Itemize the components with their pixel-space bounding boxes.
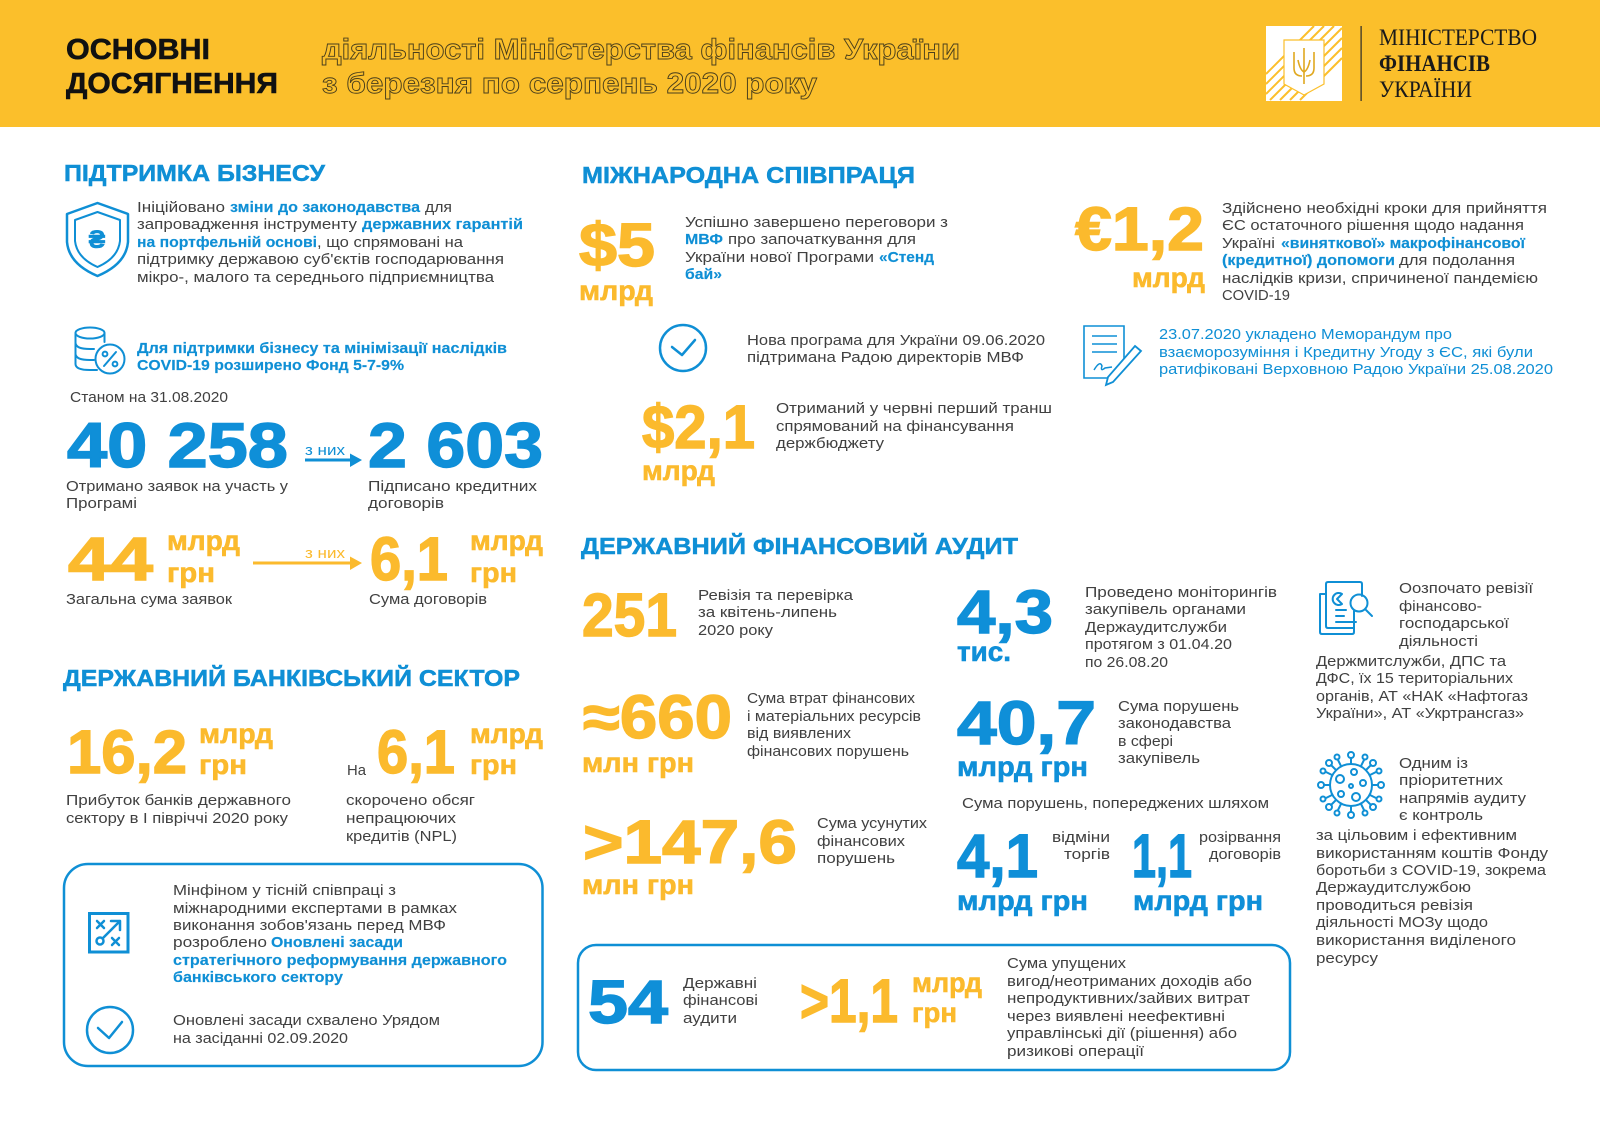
- text: memorandum: взаєморозуміння і Кредитну Угоду з ЄС, які були: [1159, 344, 1533, 361]
- text: IMF negotiations: про започаткування для: [728, 231, 916, 248]
- stat: 40.7 billion violations: Сума порушень: [1118, 698, 1239, 715]
- text: government approval: Оновлені засади схвалено Урядом: [173, 1012, 440, 1029]
- caption: prevented violations: Сума порушень, попереджених шляхом: [962, 795, 1269, 812]
- text: strategic reform: виконання зобов'язань перед МВФ: [173, 917, 446, 934]
- text: audit scope: діяльності: [1399, 633, 1478, 650]
- stat: 1.1 billion lost revenue: млрд: [912, 967, 982, 998]
- stat: 5 billion dollars: [579, 211, 655, 306]
- stat: 1.1 billion terminated contracts: [1132, 822, 1281, 916]
- stat: 2.1 billion dollars: млрд: [642, 455, 715, 486]
- text: COVID fund control: за цільовим і ефективним: [1316, 827, 1517, 844]
- stat: total applications sum: млрд: [167, 525, 240, 556]
- logo wordmark: МІНІСТЕРСТВО: [1379, 25, 1537, 50]
- text: COVID fund control: проводиться ревізія: [1316, 897, 1473, 914]
- stat: NPL reduction: непрацюючих: [346, 810, 457, 827]
- text: first tranche: держбюджету: [776, 435, 885, 452]
- icon: check circle: [87, 1007, 133, 1053]
- text: government approval: [173, 1012, 440, 1047]
- heading: international cooperation: МІЖНАРОДНА СПІВПРАЦЯ: [582, 162, 915, 188]
- stat: 1.1 billion terminated contracts: 1,1: [1132, 822, 1192, 890]
- text: memorandum: ратифіковані Верховною Радою України 25.08.2020: [1159, 361, 1553, 378]
- text: audit scope: України», АТ «Укртрансгаз»: [1316, 705, 1524, 722]
- stat: 1.1 billion lost revenue: [800, 967, 982, 1035]
- stat: 4.1 billion cancelled tenders: 4,1: [957, 822, 1038, 890]
- stat: total applications sum: [66, 525, 240, 608]
- text: memorandum: [1159, 326, 1553, 378]
- text: EU macro-financial assistance: «виняткової» макрофінансової: [1281, 235, 1526, 252]
- text: IMF negotiations: України нової Програми: [685, 249, 874, 266]
- stat: 1.2 billion euro: €1,2: [1075, 195, 1204, 263]
- stat: 4.3 thousand monitorings: [957, 578, 1277, 671]
- stat: 4.3 thousand monitorings: Держаудитслужби: [1085, 619, 1227, 636]
- text: COVID fund control: ресурсу: [1316, 950, 1379, 967]
- stat: NPL reduction: [346, 718, 543, 845]
- stat: contracts: Підписано кредитних: [368, 478, 538, 495]
- stat: 40.7 billion violations: законодавства: [1118, 715, 1232, 732]
- panel: state financial audit: [578, 532, 1549, 1070]
- stat: 147.6 million eliminated: Сума усунутих: [817, 815, 928, 832]
- text: lost revenue description: через виявлені неефективні: [1007, 1008, 1225, 1025]
- stat: contracts sum: [369, 525, 543, 608]
- text: legislation changes: мікро-, малого та середнього підприємництва: [137, 269, 495, 286]
- text: legislation changes: на портфельній основі: [137, 234, 317, 251]
- stat: bank profit: Прибуток банків державного: [66, 792, 291, 809]
- stat: 660 million loss: від виявлених: [747, 725, 852, 742]
- text: strategic reform: Мінфіном у тісній співпраці з: [173, 882, 396, 899]
- text: government approval: на засіданні 02.09.2020: [173, 1030, 348, 1047]
- stat: NPL reduction: млрд: [470, 718, 543, 749]
- text: new program: [747, 332, 1045, 366]
- text: COVID fund control: Одним із: [1399, 755, 1468, 772]
- title: ДОСЯГНЕННЯ: [66, 68, 278, 100]
- text: legislation changes: державних гарантій: [362, 216, 523, 233]
- stat: 4.3 thousand monitorings: закупівель органами: [1085, 601, 1246, 618]
- stat: contracts sum: 6,1: [370, 525, 448, 593]
- text: memorandum: 23.07.2020 укладено Меморандум про: [1159, 326, 1452, 343]
- text: lost revenue description: Сума упущених: [1007, 955, 1127, 972]
- text: legislation changes: підтримку державою суб'єктів господарювання: [137, 251, 504, 268]
- title: [66, 34, 278, 100]
- stat: 1.1 billion terminated contracts: млрд грн: [1133, 885, 1263, 916]
- text: EU macro-financial assistance: наслідків кризи, спричиненої пандемією: [1222, 270, 1538, 287]
- text: COVID fund control: використанням коштів Фонду: [1316, 845, 1549, 862]
- stat: 660 million loss: ≈660: [583, 683, 732, 751]
- text: COVID fund control: пріоритетних: [1399, 772, 1504, 789]
- stat: contracts: договорів: [368, 495, 444, 512]
- text: first tranche: Отриманий у червні перший транш: [776, 400, 1052, 417]
- text: IMF negotiations: [685, 214, 948, 283]
- stat: 660 million loss: фінансових порушень: [747, 743, 909, 760]
- stat: contracts sum: грн: [470, 557, 517, 588]
- date note: Станом на 31.08.2020: [70, 389, 228, 406]
- stat: 147.6 million eliminated: >147,6: [583, 808, 797, 876]
- logo wordmark: [1360, 25, 1537, 102]
- arrow: of them yellow: з них: [305, 545, 346, 562]
- stat: NPL reduction: кредитів (NPL): [346, 828, 457, 845]
- stat: 660 million loss: Сума втрат фінансових: [747, 690, 916, 707]
- stat: NPL reduction: грн: [470, 749, 517, 780]
- text: lost revenue description: вигод/неотриманих доходів або: [1007, 973, 1252, 990]
- text: legislation changes: зміни до законодавства: [230, 199, 421, 216]
- text: EU macro-financial assistance: ЄС остаточного рішення щодо надання: [1222, 217, 1524, 234]
- stat: contracts: [368, 411, 543, 512]
- heading: financial audit: ДЕРЖАВНИЙ ФІНАНСОВИЙ АУДИТ: [581, 532, 1019, 559]
- stat: 40.7 billion violations: закупівель: [1118, 750, 1200, 767]
- subtitle: діяльності Міністерства фінансів України: [322, 34, 960, 66]
- text: EU macro-financial assistance: [1222, 200, 1547, 304]
- stat: 4.3 thousand monitorings: тис.: [957, 636, 1011, 667]
- stat: 251 audits: 2020 року: [698, 622, 774, 639]
- text: IMF negotiations: «Стенд: [879, 249, 934, 266]
- text: strategic reform: банківського сектору: [173, 969, 344, 986]
- stat: 1.1 billion terminated contracts: розірвання: [1199, 829, 1281, 846]
- text: strategic reform: розроблено: [173, 934, 267, 951]
- stat: contracts: 2 603: [368, 411, 543, 481]
- text: lost revenue description: [1007, 955, 1252, 1060]
- text: EU macro-financial assistance: Україні: [1222, 235, 1275, 252]
- logo wordmark: УКРАЇНИ: [1379, 77, 1472, 102]
- stat: 4.3 thousand monitorings: 4,3: [957, 578, 1053, 646]
- text: audit scope: ДФС, їх 15 територіальних: [1316, 670, 1514, 687]
- stat: 660 million loss: і матеріальних ресурсів: [747, 708, 921, 725]
- stat: 147.6 million eliminated: фінансових: [817, 833, 906, 850]
- heading: banking sector: ДЕРЖАВНИЙ БАНКІВСЬКИЙ СЕКТОР: [63, 664, 520, 691]
- stat: 1.2 billion euro: млрд: [1132, 262, 1205, 293]
- callout: fund expansion: Для підтримки бізнесу та мінімізації наслідків: [137, 340, 507, 357]
- text: COVID fund control: є контроль: [1399, 807, 1483, 824]
- callout: fund expansion: COVID-19 розширено Фонд 5-7-9%: [137, 357, 404, 374]
- stat: 1.2 billion euro: [1075, 195, 1205, 293]
- text: COVID fund control: Держаудитслужбою: [1316, 879, 1471, 896]
- text: EU macro-financial assistance: Здійснено необхідні кроки для прийняття: [1222, 200, 1547, 217]
- stat: bank profit: сектору в І півріччі 2020 року: [66, 810, 289, 827]
- text: IMF negotiations: МВФ: [685, 231, 723, 248]
- stat: bank profit: млрд: [199, 718, 273, 749]
- text: lost revenue description: непродуктивних/зайвих витрат: [1007, 990, 1250, 1007]
- text: strategic reform: стратегічного реформування державного: [173, 952, 507, 969]
- text: COVID fund control: [1316, 755, 1549, 967]
- stat: 2.1 billion dollars: $2,1: [642, 393, 755, 461]
- stat: 4.3 thousand monitorings: протягом з 01.04.20: [1085, 636, 1232, 653]
- stat: 40.7 billion violations: [957, 689, 1239, 782]
- stat: 40.7 billion violations: 40,7: [957, 689, 1096, 757]
- stat: NPL reduction: 6,1: [377, 718, 455, 786]
- text: lost revenue description: управлінські дії (рішення) або: [1007, 1025, 1237, 1042]
- stat: 40.7 billion violations: млрд грн: [957, 751, 1088, 782]
- panel: audit results box: [578, 945, 1290, 1070]
- text: COVID fund control: напрямів аудиту: [1399, 790, 1527, 807]
- logo wordmark: ФІНАНСІВ: [1379, 51, 1490, 76]
- heading: business support: ПІДТРИМКА БІЗНЕСУ: [64, 160, 325, 186]
- subtitle: [322, 34, 960, 100]
- stat: applications: 40 258: [67, 411, 288, 481]
- stat: 5 billion dollars: $5: [579, 211, 655, 279]
- stat: 54 audits: Державні: [683, 975, 757, 992]
- icon: check circle: [660, 325, 706, 371]
- text: COVID fund control: боротьби з COVID-19, зокрема: [1316, 862, 1547, 879]
- stat: bank profit: грн: [199, 749, 247, 780]
- stat: 1.1 billion lost revenue: грн: [912, 997, 957, 1028]
- text: first tranche: [776, 400, 1052, 452]
- text: strategic reform: Оновлені засади: [271, 934, 403, 951]
- stat: total applications sum: Загальна сума заявок: [66, 591, 232, 608]
- text: IMF negotiations: бай»: [685, 266, 722, 283]
- title: ОСНОВНІ: [66, 34, 210, 66]
- stat: 4.3 thousand monitorings: по 26.08.20: [1085, 654, 1168, 671]
- text: lost revenue description: ризикові операції: [1007, 1043, 1145, 1060]
- stat: applications: Програмі: [66, 495, 137, 512]
- panel: business support: [64, 160, 543, 608]
- icon: virus: [1318, 752, 1384, 818]
- stat: 1.1 billion terminated contracts: договорів: [1209, 846, 1281, 863]
- stat: 4.1 billion cancelled tenders: млрд грн: [957, 885, 1088, 916]
- stat: 660 million loss: млн грн: [582, 747, 694, 778]
- stat: total applications sum: грн: [167, 557, 215, 588]
- stat: 1.1 billion lost revenue: >1,1: [800, 967, 898, 1035]
- text: legislation changes: для: [425, 199, 452, 216]
- icon: document with magnifier: [1320, 582, 1372, 634]
- header band: [0, 0, 1600, 127]
- text: legislation changes: [137, 199, 523, 286]
- icon: signed document: [1084, 326, 1141, 385]
- stat: applications: [66, 411, 289, 512]
- arrow: of them blue: [305, 442, 362, 467]
- stat: 147.6 million eliminated: порушень: [817, 850, 895, 867]
- arrow: of them blue: з них: [305, 442, 346, 459]
- icon: hryvnia shield: [67, 203, 128, 276]
- panel: strategic reform box: [64, 864, 542, 1066]
- text: first tranche: спрямований на фінансування: [776, 418, 1014, 435]
- stat: 40.7 billion violations: в сфері: [1118, 733, 1173, 750]
- stat: applications: Отримано заявок на участь у: [66, 478, 289, 495]
- callout: fund expansion: [137, 340, 507, 374]
- text: EU macro-financial assistance: (кредитної) допомоги: [1222, 252, 1395, 269]
- text: strategic reform: [173, 882, 507, 986]
- stat: 4.1 billion cancelled tenders: торгів: [1064, 846, 1110, 863]
- text: audit scope: органів, АТ «НАК «Нафтогаз: [1316, 688, 1528, 705]
- panel: state banking sector: [63, 664, 543, 1066]
- text: audit scope: фінансово-: [1399, 598, 1482, 615]
- logo emblem: [1266, 26, 1342, 101]
- text: IMF negotiations: Успішно завершено переговори з: [685, 214, 948, 231]
- text: EU macro-financial assistance: для подолання: [1399, 252, 1515, 269]
- stat: NPL reduction: На: [347, 762, 367, 779]
- text: COVID fund control: діяльності МОЗу щодо: [1316, 914, 1488, 931]
- text: audit scope: Держмитслужби, ДПС та: [1316, 653, 1507, 670]
- text: legislation changes: запровадження інструменту: [137, 216, 358, 233]
- stat: contracts sum: Сума договорів: [369, 591, 487, 608]
- stat: 54 audits: аудити: [683, 1010, 737, 1027]
- text: strategic reform: міжнародними експертами в рамках: [173, 900, 458, 917]
- arrow: of them yellow: [253, 545, 362, 570]
- stat: 4.1 billion cancelled tenders: відміни: [1052, 829, 1110, 846]
- stat: 4.3 thousand monitorings: Проведено моніторингів: [1085, 584, 1277, 601]
- stat: 251 audits: [582, 581, 854, 649]
- text: new program: Нова програма для України 09.06.2020: [747, 332, 1045, 349]
- stat: 660 million loss: [582, 683, 921, 778]
- stat: 147.6 million eliminated: [582, 808, 928, 900]
- stat: 4.1 billion cancelled tenders: [957, 822, 1110, 916]
- stat: 251 audits: Ревізія та перевірка: [698, 587, 854, 604]
- stat: bank profit: 16,2: [67, 718, 187, 786]
- stat: NPL reduction: скорочено обсяг: [346, 792, 476, 809]
- stat: total applications sum: 44: [68, 525, 153, 593]
- stat: 54 audits: 54: [588, 968, 668, 1036]
- text: EU macro-financial assistance: COVID-19: [1222, 287, 1290, 304]
- stat: 147.6 million eliminated: млн грн: [582, 869, 694, 900]
- text: legislation changes: , що спрямовані на: [317, 234, 464, 251]
- stat: contracts sum: млрд: [470, 525, 543, 556]
- text: audit scope: господарської: [1399, 615, 1510, 632]
- stat: 54 audits: [588, 968, 758, 1036]
- icon: strategy board: [90, 914, 128, 952]
- panel: international cooperation: [579, 162, 1553, 486]
- text: audit scope: Оозпочато ревізії: [1399, 580, 1534, 597]
- text: COVID fund control: використання виділеного: [1316, 932, 1516, 949]
- text: legislation changes: Ініційовано: [137, 199, 225, 216]
- stat: bank profit: [66, 718, 291, 827]
- icon: hryvnia shield: ₴: [89, 226, 106, 254]
- stat: 54 audits: фінансові: [683, 992, 758, 1009]
- text: audit scope: [1316, 580, 1534, 722]
- subtitle: з березня по серпень 2020 року: [322, 68, 817, 100]
- stat: 5 billion dollars: млрд: [579, 275, 653, 306]
- stat: 251 audits: за квітень-липень: [698, 604, 837, 621]
- text: new program: підтримана Радою директорів МВФ: [747, 349, 1024, 366]
- icon: coins with percent: [76, 328, 124, 374]
- stat: 251 audits: 251: [582, 581, 677, 649]
